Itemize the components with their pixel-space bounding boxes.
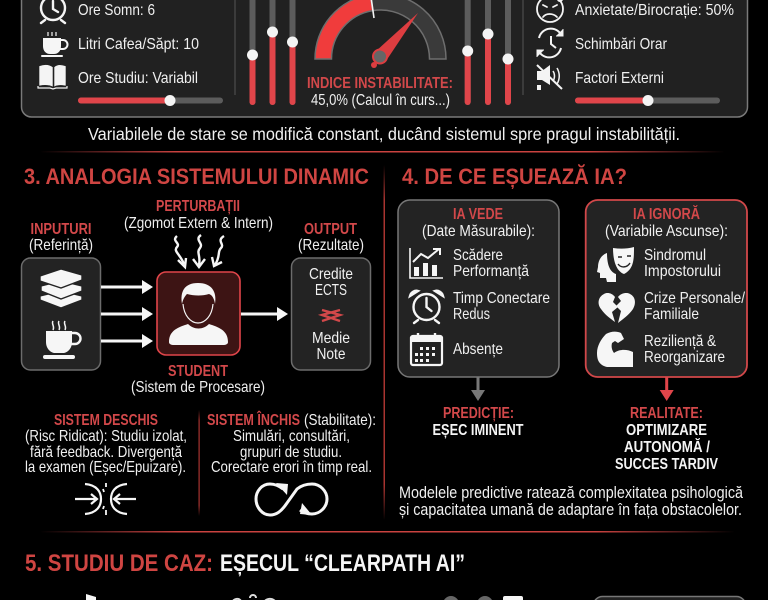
result: reality: SUCCES TARDIV bbox=[615, 456, 719, 473]
icon: coffee cup bbox=[43, 321, 80, 359]
label: resilience: Reziliență & bbox=[644, 333, 716, 350]
icon: student silhouette bbox=[169, 281, 228, 345]
icon: open book bbox=[38, 65, 67, 89]
icon: alarm clock bbox=[41, 0, 65, 23]
label: impostor syndrome bbox=[644, 247, 721, 280]
arrow: prediction bbox=[471, 377, 485, 401]
label: output: OUTPUT bbox=[304, 221, 357, 238]
card: what AI ignores: (Variabile Ascunse): bbox=[605, 223, 728, 240]
sliders: left vertical group bbox=[247, 0, 298, 105]
panel: section 4 why AI fails bbox=[398, 164, 747, 519]
box: inputs bbox=[22, 258, 100, 370]
label: inputs: (Referință) bbox=[29, 237, 93, 254]
card: what AI sees: IA VEDE bbox=[453, 206, 503, 223]
icon: diverging red arrows bbox=[322, 310, 340, 321]
label: inputs bbox=[29, 221, 93, 254]
label: resilience: Reorganizare bbox=[644, 349, 725, 366]
label: reduced connection time: Redus bbox=[453, 306, 490, 323]
box: output bbox=[292, 258, 370, 370]
text block: closed system: SISTEM ÎNCHIS bbox=[207, 411, 300, 429]
slider: right horizontal bbox=[575, 95, 720, 106]
label: performance drop: Scădere bbox=[453, 247, 503, 264]
label: impostor syndrome: Impostorului bbox=[644, 263, 721, 280]
label: coffee litres: Litri Cafea/Săpt: 10 bbox=[78, 36, 199, 53]
result: reality: REALITATE: bbox=[630, 405, 703, 422]
label: reduced connection time bbox=[453, 290, 550, 323]
card: what AI sees: (Date Măsurabile): bbox=[422, 223, 535, 240]
box: output: ECTS bbox=[315, 282, 347, 299]
text block: closed system: (Stabilitate): bbox=[304, 412, 376, 429]
label: impostor syndrome: Sindromul bbox=[644, 247, 706, 264]
box: output: Note bbox=[316, 346, 346, 363]
heading: section 5 case study: EȘECUL “CLEARPATH AI” bbox=[220, 550, 465, 577]
heading: section 4: 4. DE CE EȘUEAZĂ IA? bbox=[402, 164, 627, 189]
label: external factors: Factori Externi bbox=[575, 70, 664, 87]
text block: open system: la examen (Eșec/Epuizare). bbox=[25, 459, 186, 476]
box: student bbox=[157, 272, 240, 355]
label: personal crises: Crize Personale/ bbox=[644, 290, 745, 307]
icon: infinity loop bbox=[256, 483, 327, 515]
result: reality: OPTIMIZARE bbox=[626, 422, 707, 439]
label: performance drop: Performanță bbox=[453, 263, 529, 280]
label: personal crises: Familiale bbox=[644, 306, 699, 323]
label: disturbances bbox=[124, 198, 273, 232]
text block: open system: fără feedback. Divergență bbox=[30, 444, 182, 461]
label: sleep hours: Ore Somn: 6 bbox=[78, 2, 155, 19]
text block: open system bbox=[25, 412, 187, 476]
label: absences: Absențe bbox=[453, 341, 503, 358]
icon: calendar bbox=[411, 333, 442, 365]
result: reality: AUTONOMĂ / bbox=[624, 439, 711, 456]
heading: section 3: 3. ANALOGIA SISTEMULUI DINAMIC bbox=[24, 164, 369, 189]
icon: anxious face bbox=[537, 0, 563, 22]
sliders: right vertical group bbox=[462, 0, 514, 105]
label: student: STUDENT bbox=[168, 363, 228, 380]
label: performance drop bbox=[453, 247, 529, 280]
text block: open system: SISTEM DESCHIS bbox=[54, 412, 158, 429]
icon: flexed bicep bbox=[597, 332, 633, 367]
panel: section 3 dynamic system analogy bbox=[22, 164, 376, 516]
icon: performance chart bbox=[410, 248, 443, 278]
card: what AI sees bbox=[398, 200, 559, 377]
box: output: Medie bbox=[312, 330, 350, 347]
heading: section 5 case study: 5. STUDIU DE CAZ: bbox=[25, 550, 213, 577]
text block: closed system: Corectare erori în timp real. bbox=[211, 459, 372, 476]
text block: open system: (Risc Ridicat): Studiu izolat, bbox=[25, 428, 187, 445]
text block: closed system bbox=[207, 411, 376, 476]
label: instability index: INDICE INSTABILITATE: bbox=[307, 75, 453, 92]
label: personal crises bbox=[644, 290, 745, 323]
label: reduced connection time: Timp Conectare bbox=[453, 290, 550, 307]
result: prediction bbox=[432, 405, 524, 439]
label: student bbox=[131, 363, 265, 396]
label: disturbances: (Zgomot Extern & Intern) bbox=[124, 215, 273, 232]
icon: schedule change bbox=[537, 29, 563, 57]
label: instability index bbox=[307, 75, 453, 109]
label: instability index: 45,0% (Calcul în curs...) bbox=[311, 92, 450, 109]
result: prediction: EȘEC IMINENT bbox=[432, 422, 524, 439]
result: reality bbox=[615, 405, 719, 473]
icon: open system divergence bbox=[75, 483, 136, 515]
label: schedule changes: Schimbări Orar bbox=[575, 36, 668, 53]
arrow: reality bbox=[660, 377, 674, 401]
text block: closed system: Simulări, consultări, bbox=[233, 428, 350, 445]
label: resilience bbox=[644, 333, 725, 366]
icon: cut-off case study icons bbox=[86, 594, 523, 600]
arrows: inputs to student bbox=[101, 280, 153, 348]
icon: disturbance arrows bbox=[175, 235, 224, 267]
text block: model conclusion bbox=[399, 484, 744, 519]
slider: left horizontal bbox=[78, 95, 223, 106]
label: inputs: INPUTURI bbox=[30, 221, 92, 238]
label: student: (Sistem de Procesare) bbox=[131, 379, 265, 396]
box: output: Credite bbox=[309, 266, 353, 283]
label: output: (Rezultate) bbox=[298, 237, 364, 254]
card: what AI ignores: IA IGNORĂ bbox=[633, 206, 700, 223]
icon: stacked books bbox=[40, 269, 82, 308]
text block: closed system: grupuri de studiu. bbox=[240, 444, 342, 461]
label: output bbox=[298, 221, 364, 254]
card: what AI ignores bbox=[586, 200, 747, 377]
label: disturbances: PERTURBAȚII bbox=[156, 198, 240, 215]
icon: impostor mask bbox=[597, 247, 634, 282]
icon: muted speaker bbox=[537, 65, 562, 90]
panel: cut-off case study card bbox=[594, 596, 746, 600]
icon: alarm clock bbox=[410, 291, 443, 323]
arrow: student to output bbox=[241, 307, 288, 321]
label: anxiety: Anxietate/Birocrație: 50% bbox=[575, 2, 734, 19]
chart: instability gauge bbox=[315, 0, 446, 68]
icon: coffee cup bbox=[41, 32, 68, 57]
icon: broken heart bbox=[599, 293, 635, 323]
caption: state variables: Variabilele de stare se modifică constant, ducând sistemul spre pragul instabilității. bbox=[88, 124, 680, 144]
label: study hours: Ore Studiu: Variabil bbox=[78, 70, 198, 87]
panel: state variables dashboard bbox=[22, 0, 748, 117]
result: prediction: PREDICȚIE: bbox=[443, 405, 514, 422]
heading: section 5 case study bbox=[25, 550, 465, 577]
